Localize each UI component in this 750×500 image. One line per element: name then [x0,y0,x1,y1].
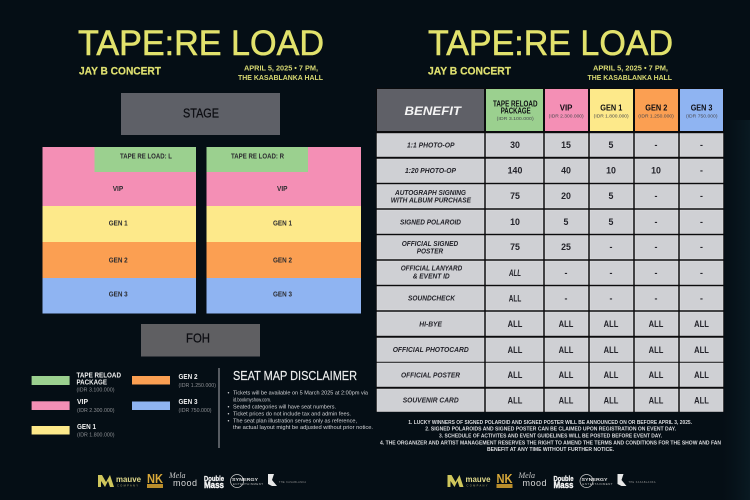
row: official lanyard: - [565,268,568,278]
table header: GEN 2 [645,103,668,112]
title: right: TAPE:RE LOAD [428,24,673,63]
row: official poster [377,363,723,386]
logo: mauve [448,475,491,487]
subtitle: artist: JAY B CONCERT [79,66,161,78]
logo: Mela Mood: mood [522,478,546,488]
logo: Synergy: ENTERTAINMENT [582,482,613,486]
date and venue: THE KASABLANKA HALL [588,73,672,82]
row: official poster: ALL [604,370,619,380]
logo: Synergy: SYNERGY [582,477,608,482]
table header: GEN 1 [600,103,623,112]
legend: (IDR 750.000) [178,408,212,414]
row: soundcheck: - [610,293,613,303]
legend: GEN 1 [77,422,96,431]
logo: Double Mass: Double [554,476,574,483]
row: autograph signing: - [655,191,658,201]
row: soundcheck: ALL [509,293,522,303]
logo: Synergy [580,474,613,488]
row: official photocard: ALL [649,345,664,355]
row: official poster: ALL [694,370,709,380]
row: official poster: ALL [508,370,523,380]
row: autograph signing: 75 [510,191,520,201]
row: signed polaroid: - [655,217,658,227]
row: official signed poster: OFFICIAL SIGNED [402,241,458,248]
disclaimer list: the actual layout might be adjusted without prior notice. [233,425,373,431]
row: 1:1 photo-op [377,134,723,156]
row: 1:1 photo-op: 30 [510,140,520,150]
seating block: right [206,147,361,314]
disclaimer list: Seated categories will have seat numbers. [233,404,336,410]
row: hi-bye: ALL [559,319,574,329]
row: autograph signing: - [700,191,703,201]
legend: VIP [77,397,88,406]
logo: Synergy [230,474,263,488]
row: signed polaroid: 10 [510,217,520,227]
row: souvenir card: ALL [604,396,619,406]
logo: NK: NK [147,471,164,486]
row: official poster: ALL [559,370,574,380]
row: 1:20 photo-op: 10 [651,166,661,176]
legend: GEN 2 [178,372,198,381]
row: souvenir card: ALL [649,396,664,406]
logo: The Kasablanka: THE KASABLANKA [279,481,306,484]
legend: (IDR 1.250.000) [178,383,216,389]
row: soundcheck [377,286,723,310]
disclaimer list: id.bookmyshow.com. [233,398,271,404]
logo: mauve: mauve [466,475,491,484]
date and venue [588,64,672,82]
row: hi-bye [377,312,723,336]
legend [32,370,216,438]
row: soundcheck: - [700,293,703,303]
row: signed polaroid: - [700,217,703,227]
row: 1:1 photo-op: - [655,140,658,150]
logo: The Kasablanka [618,474,656,486]
row: official photocard: ALL [694,345,709,355]
seating block: left [42,147,196,314]
logo: mauve: COMPANY [466,483,488,487]
disclaimer heading: SEAT MAP DISCLAIMER [233,368,357,383]
row: souvenir card: ALL [559,396,574,406]
row: official lanyard: - [610,268,613,278]
logo: Double Mass: Double [204,476,224,483]
logo: Synergy: SYNERGY [232,477,258,482]
panel: benefits [376,24,724,490]
row: hi-bye: ALL [604,319,619,329]
row: souvenir card: ALL [694,396,709,406]
row: official photocard: ALL [508,345,523,355]
legend: GEN 3 [178,397,198,406]
seating block: left: VIP [113,186,123,193]
logo: Mela Mood: Mela [168,471,185,480]
disclaimer list: • [228,418,230,424]
row: souvenir card: ALL [508,396,523,406]
disclaimer list: The seat plan illustration serves only as reference, [233,418,357,424]
seating block: right: GEN 3 [273,291,292,298]
footnotes: 4. THE ORGANIZER AND ARTIST MANAGEMENT RESERVES THE RIGHT TO AMEND THE TERMS AND CONDITIONS FOR THE SHOW AND FAN [380,440,721,446]
sponsor logos: right [448,471,656,490]
row: official photocard: ALL [604,345,619,355]
logo: NK: NK [496,471,513,486]
date and venue: APRIL 5, 2025 • 7 PM, [244,64,318,72]
row: official poster: ALL [649,370,664,380]
table header: BENEFIT [404,104,463,118]
legend: (IDR 1.800.000) [77,432,115,438]
disclaimer list: Ticket prices do not include tax and admin fees. [233,411,351,417]
benefit table [376,88,724,412]
logo: Synergy: ENTERTAINMENT [233,482,263,486]
footnotes: 1. LUCKY WINNERS OF SIGNED POLAROID AND SIGNED POSTER WILL BE ANNOUNCED ON OR BEFORE APRIL 3, 2025. [408,420,692,426]
subtitle: artist: JAY B CONCERT [428,66,511,78]
row: hi-bye: ALL [508,319,523,329]
row: official photocard: OFFICIAL PHOTOCARD [393,347,469,354]
seating block: left: GEN 1 [109,220,128,228]
sponsor logos: left [98,471,306,490]
table header: (IDR 2.300.000) [549,114,584,120]
row: soundcheck: - [655,293,658,303]
row: soundcheck: - [565,293,568,303]
logo: Mela Mood: mood [173,478,197,488]
legend: (IDR 3.100.000) [76,388,115,394]
logo: The Kasablanka [268,474,306,486]
footnotes: 2. SIGNED POLAROIDS AND SIGNED POSTER CAN BE CLAIMED UPON REGISTRATION ON EVENT DAY. [425,427,676,433]
disclaimer list: • [228,391,230,397]
row: official signed poster: 75 [510,242,520,252]
table header: (IDR 1.250.000) [638,114,674,120]
panel: seat map [32,24,373,490]
seating block: left: GEN 2 [109,258,128,265]
table header: TAPE RELOAD [493,100,538,108]
title: left: TAPE:RE LOAD [78,24,324,63]
logo: Mela Mood [168,471,197,488]
row: 1:20 photo-op: 10 [606,166,616,176]
table header: PACKAGE [501,106,531,115]
date and venue: THE KASABLANKA HALL [238,73,323,82]
logo: mauve: mauve [116,475,142,484]
row: 1:1 photo-op: 15 [561,140,571,150]
row: souvenir card [377,389,723,412]
row: signed polaroid: 5 [564,217,569,227]
row: official lanyard: ALL [508,268,521,278]
row: signed polaroid [377,210,723,234]
table header: VIP [560,103,573,112]
row: 1:20 photo-op: - [700,166,703,176]
FOH [141,324,260,356]
row: hi-bye: ALL [694,319,709,329]
seating block: left: TAPE RE LOAD: L [120,154,173,160]
row: 1:1 photo-op: 1:1 PHOTO-OP [407,142,455,150]
logo: Double Mass: Mass [554,480,574,490]
seating block: right: GEN 2 [273,258,292,265]
disclaimer list [228,391,373,431]
row: 1:20 photo-op: 40 [561,166,571,176]
row: 1:20 photo-op: 140 [508,166,522,176]
row: signed polaroid: 5 [609,217,614,227]
table header: GEN 3 [691,103,713,112]
row: souvenir card: SOUVENIR CARD [403,398,459,405]
seating block: right: TAPE RE LOAD: R [231,154,284,160]
table header [377,89,723,131]
logo: mauve [98,475,142,487]
seating block: right: VIP [277,186,288,193]
table header: (IDR 1.800.000) [594,114,629,120]
row: hi-bye: ALL [649,319,664,329]
table header: (IDR 3.100.000) [497,116,534,122]
row: official signed poster: - [655,242,658,252]
row: official photocard: ALL [559,345,574,355]
row: autograph signing: WITH ALBUM PURCHASE [391,198,471,204]
logo: Double Mass [554,476,574,490]
logo: Double Mass [204,476,224,490]
disclaimer list: • [228,411,230,417]
seating block: left: GEN 3 [109,291,128,298]
logo: The Kasablanka: THE KASABLANKA [628,481,656,484]
logo: Double Mass: Mass [204,480,224,490]
row: official signed poster: 25 [561,242,571,252]
row: official signed poster: - [610,242,613,252]
row: official signed poster: POSTER [417,249,443,256]
date and venue [238,64,323,82]
row: official lanyard: - [655,268,658,278]
logo: Mela Mood [518,471,546,488]
row: official photocard [377,338,723,362]
legend: (IDR 2.300.000) [77,408,115,414]
row: soundcheck: SOUNDCHECK [408,296,456,303]
stage: STAGE [183,107,219,121]
row: signed polaroid: SIGNED POLAROID [400,219,461,226]
legend: TAPE RELOAD [76,370,122,380]
row: autograph signing: AUTOGRAPH SIGNING [394,190,467,197]
disclaimer list: • [228,404,230,410]
footnotes [380,420,721,453]
row: official lanyard [377,261,723,284]
stage [121,93,280,135]
row: 1:20 photo-op [377,159,723,182]
footnotes: 3. SCHEDULE OF ACTIVITES AND EVENT GUIDELINES WILL BE POSTED BEFORE EVENT DAY. [439,434,662,440]
date and venue: APRIL 5, 2025 • 7 PM, [593,64,668,72]
row: official signed poster [377,236,723,259]
row: official poster: OFFICIAL POSTER [401,372,460,379]
disclaimer list: Tickets will be available on 5 March 2025 at 2:00pm via [233,391,369,397]
row: official lanyard: & EVENT ID [413,273,450,280]
table header: (IDR 750.000) [686,114,718,120]
footnotes: BENEFIT AT ANY TIME WITHOUT FURTHER NOTICE. [487,447,614,453]
logo: Mela Mood: Mela [518,471,535,480]
row: official lanyard: - [700,268,703,278]
row: autograph signing: 5 [609,191,614,201]
row: official signed poster: - [700,242,703,252]
row: hi-bye: HI-BYE [419,321,442,328]
row: 1:20 photo-op: 1:20 PHOTO-OP [405,168,456,175]
row: 1:1 photo-op: - [700,140,703,150]
row: autograph signing [377,184,723,208]
row: official lanyard: OFFICIAL LANYARD [401,266,462,273]
row: 1:1 photo-op: 5 [609,140,614,150]
seating block: right: GEN 1 [273,220,292,228]
logo: mauve: COMPANY [117,483,138,487]
row: autograph signing: 20 [561,191,571,201]
legend: PACKAGE [76,378,107,386]
FOH: FOH [186,332,210,346]
